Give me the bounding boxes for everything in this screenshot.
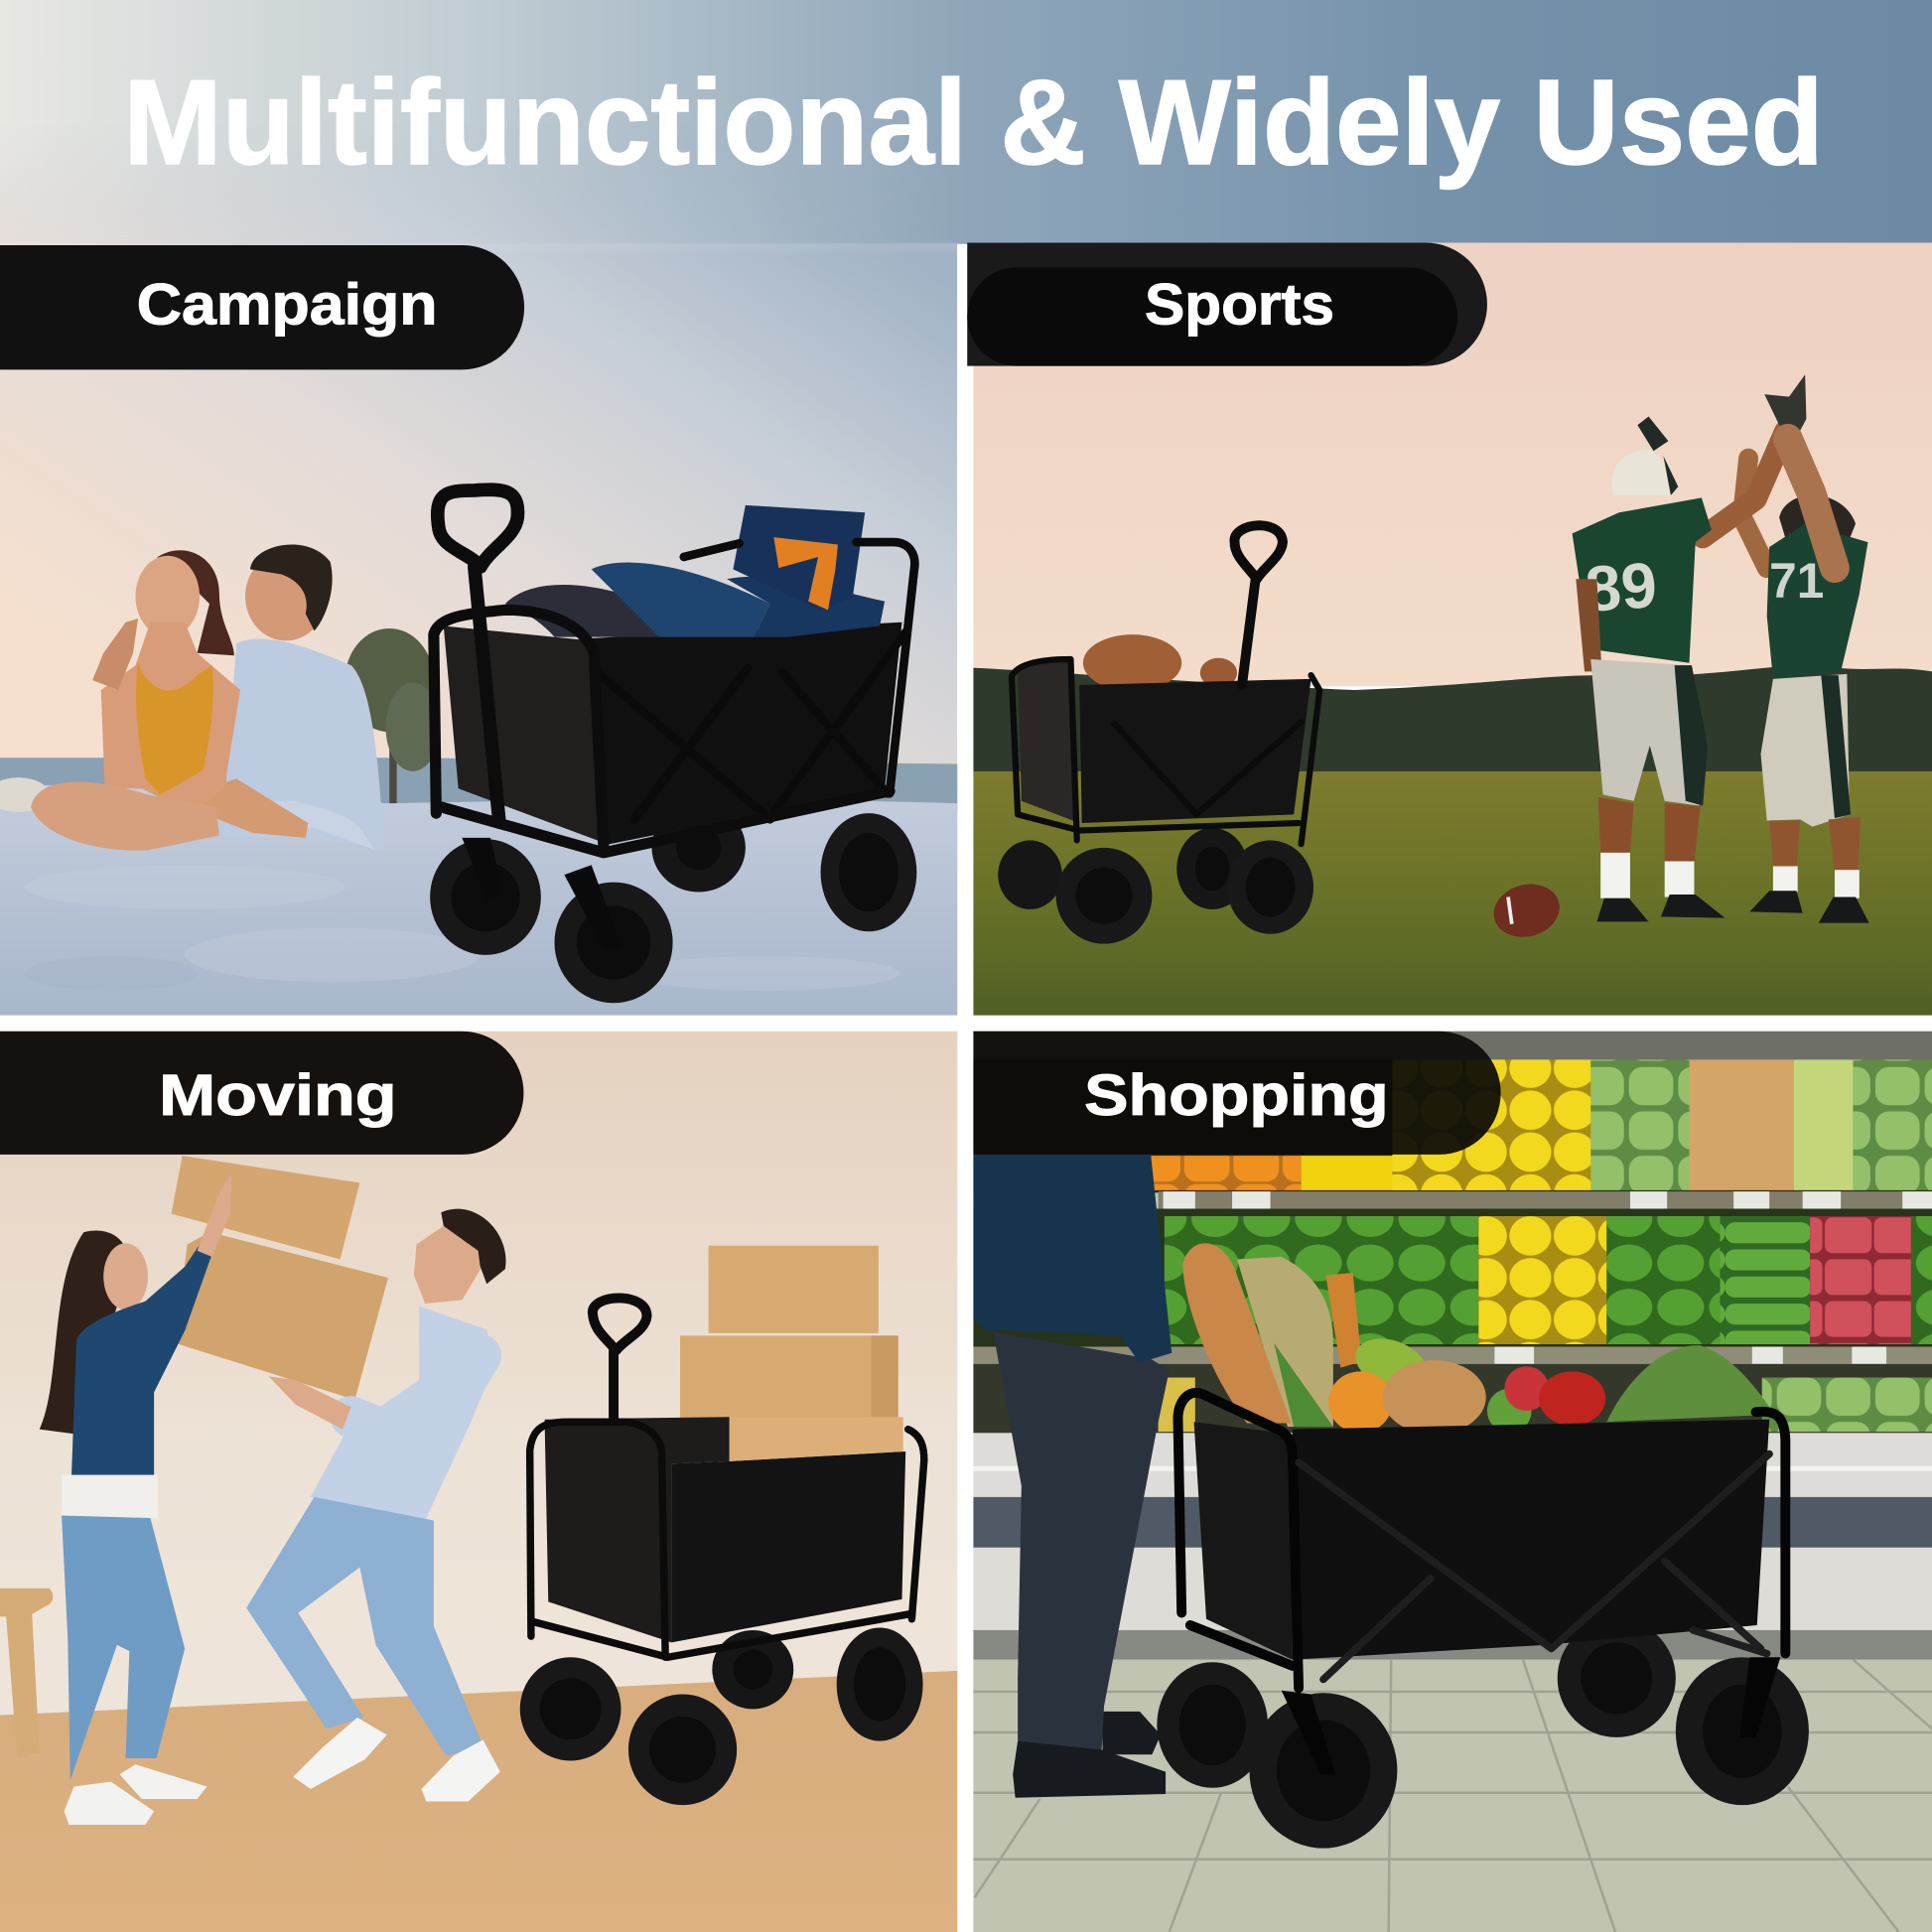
wagon: shopping: [1157, 1393, 1809, 1849]
wooden stool: [0, 1588, 53, 1758]
moving floor: [0, 1671, 957, 1932]
panel: moving: [0, 1032, 957, 1932]
header band: [0, 0, 1932, 244]
shopping store background: [973, 1032, 1932, 1932]
sports label: [967, 242, 1487, 366]
moving label: [0, 1032, 523, 1155]
sports treeline: [973, 666, 1932, 776]
panel: shopping: [973, 1032, 1932, 1932]
football: [1488, 877, 1566, 944]
title: Multifunctional & Widely Used: [123, 55, 1824, 190]
sports sky: [973, 242, 1932, 686]
campaign sea: [0, 758, 957, 813]
campaign label: Campaign: [137, 272, 438, 337]
wagon: sports: [998, 525, 1319, 944]
sports field: [973, 771, 1932, 1016]
panel: sports: [967, 242, 1932, 1016]
football players: 71: [1769, 553, 1824, 609]
man carrying boxes: [246, 1209, 506, 1801]
sports label: Sports: [1145, 272, 1334, 337]
campaign sand: [0, 777, 957, 1016]
football players: 89: [1584, 549, 1659, 625]
groceries: [1182, 1243, 1774, 1435]
cardboard box in wagon: [730, 1417, 903, 1461]
panel: campaign: [0, 123, 957, 1016]
shopping label: [973, 1032, 1501, 1155]
shopping label: Shopping: [1084, 1063, 1389, 1128]
stacked boxes held: [172, 1156, 388, 1400]
campaign tree: [345, 628, 440, 806]
wagon: campaign: [430, 489, 916, 1003]
couple on beach: [31, 545, 384, 851]
campaign sky: [0, 210, 957, 764]
wagon: moving: [520, 1298, 924, 1805]
woman carrying boxes: [40, 1173, 231, 1825]
moving label: Moving: [159, 1063, 397, 1128]
produce shelves: [973, 1032, 1932, 1660]
moving wall: [0, 1032, 957, 1722]
football players: [1573, 374, 1869, 923]
box stack: [680, 1246, 898, 1420]
tiled floor: [973, 1660, 1932, 1932]
shopper: [973, 1155, 1172, 1798]
campaign label: [0, 245, 524, 369]
